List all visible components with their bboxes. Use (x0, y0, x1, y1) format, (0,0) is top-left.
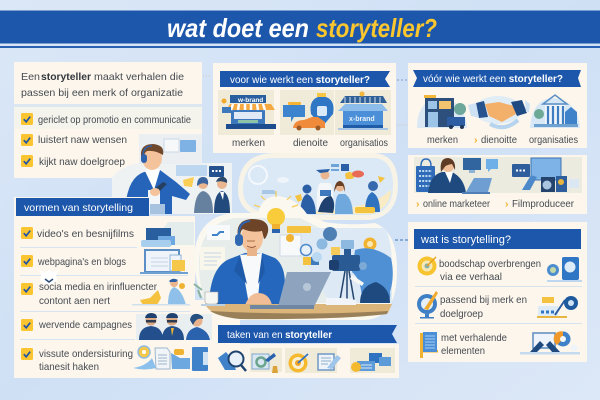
row: social media (21, 279, 190, 307)
panel: taken van en storyteller (214, 325, 399, 378)
icon: institution (530, 95, 580, 128)
banner heading: voor wie werkt een storyteller? (230, 74, 370, 86)
row: passend (417, 291, 578, 320)
row: video (21, 222, 194, 247)
ribbon heading (218, 325, 397, 343)
checklist (21, 113, 191, 168)
icon: company building (417, 95, 467, 129)
labels: › (416, 198, 420, 210)
title banner: storyteller? (316, 13, 437, 43)
panel: wat is storytelling (408, 222, 587, 362)
labels: merken (427, 134, 458, 146)
panel: vormen van storytelling (14, 197, 240, 378)
labels: online marketeer (423, 198, 490, 210)
labels: dienoitte (481, 134, 517, 146)
coffee mug (194, 284, 225, 306)
icon: magnifier and chart (218, 348, 282, 373)
heading: vormen van storytelling (24, 202, 133, 214)
labels: › (505, 198, 509, 210)
title banner: wat doet een (167, 13, 309, 43)
row: verhalende (420, 331, 580, 358)
row: visuele ondersteuning: vissute ondersisturing (39, 348, 133, 360)
banner heading (220, 71, 390, 87)
ribbon heading (413, 70, 581, 87)
row: boodschap (418, 256, 582, 283)
icon: lightbulb (254, 191, 298, 233)
ribbon heading: vóór wie werkt een storyteller? (423, 73, 563, 85)
labels: organisaties (529, 134, 578, 146)
camera and operator (329, 240, 393, 303)
row: passend: doelgroep (440, 308, 483, 320)
illustration: marketeer and film producer (414, 157, 582, 194)
row: boodschap: via ee verhaal (440, 271, 502, 283)
intro text: passen bij een merk of organizatie (21, 87, 183, 99)
labels (232, 137, 388, 149)
icon: x-brand storefront: x-brand (349, 116, 375, 123)
row: visuele ondersteuning (21, 346, 208, 373)
connector lines (203, 76, 410, 240)
illustration: team group (238, 153, 398, 220)
icon: w-brand shop: w-brand (237, 97, 263, 104)
row: webpagina (21, 250, 188, 274)
row: verhalende: met verhalende (441, 332, 507, 344)
heading (16, 198, 149, 216)
icon: target and document (285, 348, 341, 373)
row: campagnes (21, 313, 212, 340)
panel: roles (408, 155, 587, 214)
table (205, 304, 392, 319)
checklist: gericlet op promotio en communicatie (38, 114, 191, 126)
panel: vóór wie werkt (408, 63, 587, 148)
row: boodschap: boodschap overbrengen (439, 258, 541, 270)
heading: wat is storytelling? (420, 234, 511, 246)
panel: voor wie werkt (brands) (213, 63, 396, 153)
intro text (21, 71, 184, 99)
row: passend: passend bij merk en (440, 294, 527, 306)
row: video: video's en besnijfilms (37, 228, 134, 240)
panel: intro (14, 62, 202, 178)
labels: merken (232, 137, 265, 149)
icon: x-brand storefront (335, 90, 391, 135)
title banner (0, 10, 600, 48)
intro text: maakt verhalen die (94, 71, 184, 83)
illustration: storyteller with clients (112, 134, 232, 214)
icon: service pin and car (280, 90, 334, 135)
row: webpagina: webpagina's en blogs (37, 256, 126, 268)
labels (416, 198, 574, 210)
labels: organisatios (340, 137, 388, 149)
labels: Filmproduceer (512, 198, 574, 210)
floating cards (200, 225, 376, 270)
row: social media: socia media en irinfluencter (39, 281, 157, 293)
intro text: storyteller (41, 71, 91, 83)
icon: handshake (468, 96, 530, 127)
checklist: kijkt naw doelgroep (39, 156, 125, 168)
person (209, 219, 285, 305)
row: campagnes: wervende campagnes (38, 319, 132, 331)
ribbon heading: taken van en storyteller (227, 329, 332, 341)
row: visuele ondersteuning: tianesit haken (39, 361, 99, 373)
icon: w-brand shop (218, 90, 276, 135)
row: social media: contont aen nert (39, 295, 110, 307)
labels (427, 134, 578, 146)
icon: cards and coin (350, 348, 395, 373)
heading (414, 229, 581, 249)
row: verhalende: elementen (441, 345, 485, 357)
intro text: Een (21, 71, 40, 83)
papers on desk (326, 298, 356, 305)
laptop (250, 272, 331, 309)
labels: dienoite (293, 137, 328, 149)
labels: › (474, 134, 478, 146)
badge: white check (40, 270, 59, 284)
illustration: hero storyteller at laptop (194, 191, 397, 320)
checklist: luistert naw wensen (38, 134, 127, 146)
